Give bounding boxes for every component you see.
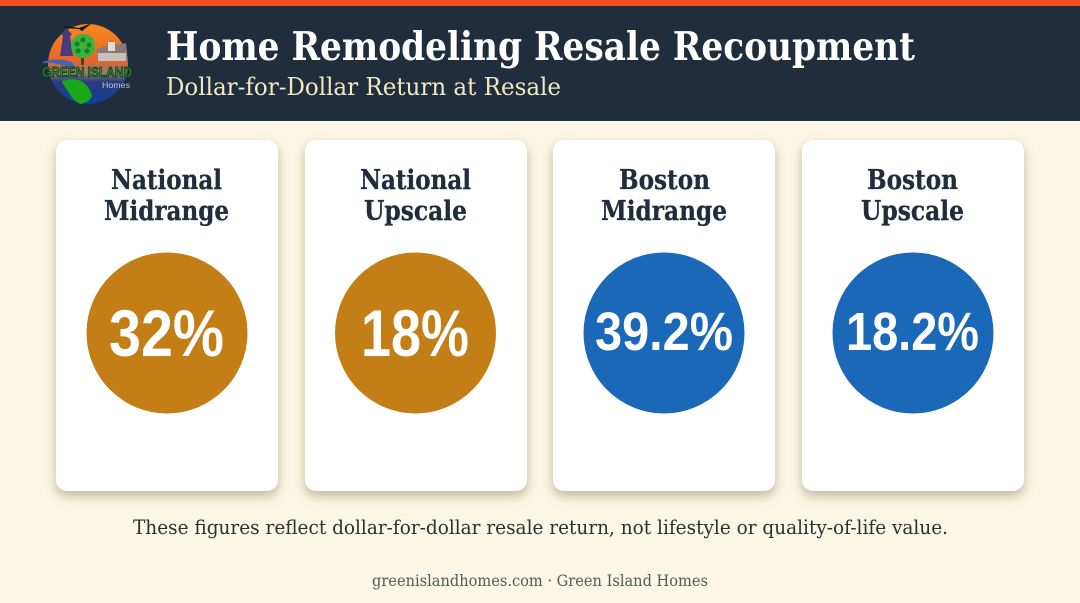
- circle: 18%: 18%: [361, 296, 469, 370]
- National Midrange heading: Midrange: [104, 196, 229, 227]
- card: Boston Upscale: [802, 140, 1024, 491]
- card: National Midrange: [56, 140, 278, 491]
- orange top accent bar: [0, 0, 1080, 6]
- circle: 32%: [86, 252, 248, 414]
- circle: 18.2%: 18.2%: [846, 302, 979, 362]
- subtitle: Dollar-for-Dollar Return at Resale: [166, 73, 561, 101]
- National Midrange heading: [104, 165, 229, 227]
- circle: 32%: 32%: [109, 296, 224, 370]
- circle: 39.2%: [584, 252, 744, 414]
- Boston Midrange heading: Midrange: [601, 196, 727, 227]
- header band: [0, 0, 1080, 121]
- Boston Midrange heading: [601, 165, 727, 227]
- disclaimer note: These figures reflect dollar-for-dollar resale return, not lifestyle or quality-of-life value.: [133, 515, 948, 539]
- National Upscale heading: [360, 165, 471, 227]
- National Upscale heading: Upscale: [364, 196, 467, 227]
- Boston Upscale heading: [861, 165, 964, 227]
- icon: Green Island Homes logo: [42, 23, 132, 104]
- circle: 18.2%: [832, 252, 994, 414]
- circle: 18%: [335, 252, 496, 414]
- Boston Upscale heading: Upscale: [861, 196, 964, 227]
- Boston Upscale heading: Boston: [867, 165, 958, 196]
- National Midrange heading: National: [111, 165, 222, 196]
- National Upscale heading: National: [360, 165, 471, 196]
- footer credit: greenislandhomes.com · Green Island Homes: [372, 571, 708, 590]
- icon: Green Island Homes logo: Homes: [102, 81, 130, 90]
- card: National Upscale: [305, 140, 527, 491]
- circle: 39.2%: 39.2%: [595, 302, 733, 362]
- title: Home Remodeling Resale Recoupment: [166, 24, 915, 70]
- Boston Midrange heading: Boston: [619, 165, 710, 196]
- icon: Green Island Homes logo: GREEN ISLAND: [42, 65, 132, 81]
- card: Boston Midrange: [553, 140, 775, 491]
